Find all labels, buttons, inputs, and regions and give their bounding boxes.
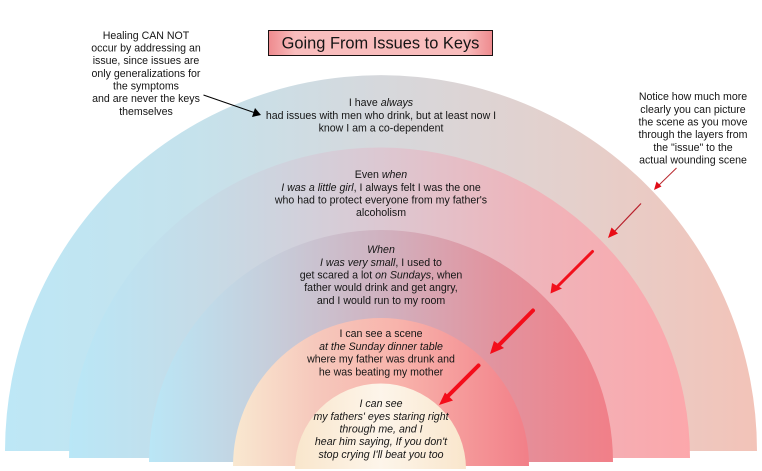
layer 2: childhood generalization [69,148,690,458]
layer 3 text: get scared a lot on Sundays, when [300,270,462,282]
layer 4 text: where my father was drunk and [306,354,455,366]
layer 1: issue [5,75,757,451]
left note: only generalizations for [92,68,201,80]
right note: clearly you can picture [640,104,746,116]
arrow: red 4 [490,310,533,354]
layer 4 text: he was beating my mother [319,366,444,378]
left note: Healing CAN NOT [103,30,190,42]
title: Going From Issues to Keys [282,34,479,52]
right note: through the layers from [639,129,748,141]
left note: issue, since issues are [93,55,199,67]
right note: the scene as you move [639,116,748,128]
layer 3 text: and I would run to my room [317,295,445,307]
layer 2 text: alcoholism [356,207,406,219]
left note: themselves [119,106,173,118]
left note: and are never the keys [92,93,200,105]
layer 5 text: my fathers' eyes staring right [313,411,450,423]
layer 5 text: hear him saying, If you don't [315,436,448,448]
layer 3 text: I was very small, I used to [320,257,442,269]
layer 4 text: I can see a scene [339,328,423,340]
arrow: red 1 [654,168,676,190]
layer 1 text: I have always [349,97,413,109]
layer 2 text: Even when [355,169,407,181]
arrow: red 2 [608,204,641,238]
arrow: black from left note [204,95,261,117]
right note: actual wounding scene [639,154,747,166]
layer 5 text: I can see [360,398,403,410]
right note: Notice how much more [639,91,747,103]
layer 1 text: had issues with men who drink, but at least now I [266,110,496,122]
layer 3: Sundays [149,230,613,462]
title [268,30,492,56]
layer 5 text: through me, and I [339,424,423,436]
layer 1 text: know I am a co-dependent [319,122,443,134]
right note: the "issue" to the [653,142,733,154]
layer 5 text: stop crying I'll beat you too [318,449,444,461]
layer 3 text: When [367,244,395,256]
layer 5: wounding scene [295,384,466,469]
layer 3 text: father would drink and get angry, [304,282,458,294]
layer 4 text: at the Sunday dinner table [319,341,443,353]
left note: occur by addressing an [91,42,201,54]
arrow: red 5 [439,366,478,405]
layer 2 text: who had to protect everyone from my father's [274,194,487,206]
layer 2 text: I was a little girl, I always felt I was the one [281,182,481,194]
layer 4: dinner table scene [233,318,529,466]
arrow: red 3 [550,252,592,294]
left note: the symptoms [113,80,179,92]
